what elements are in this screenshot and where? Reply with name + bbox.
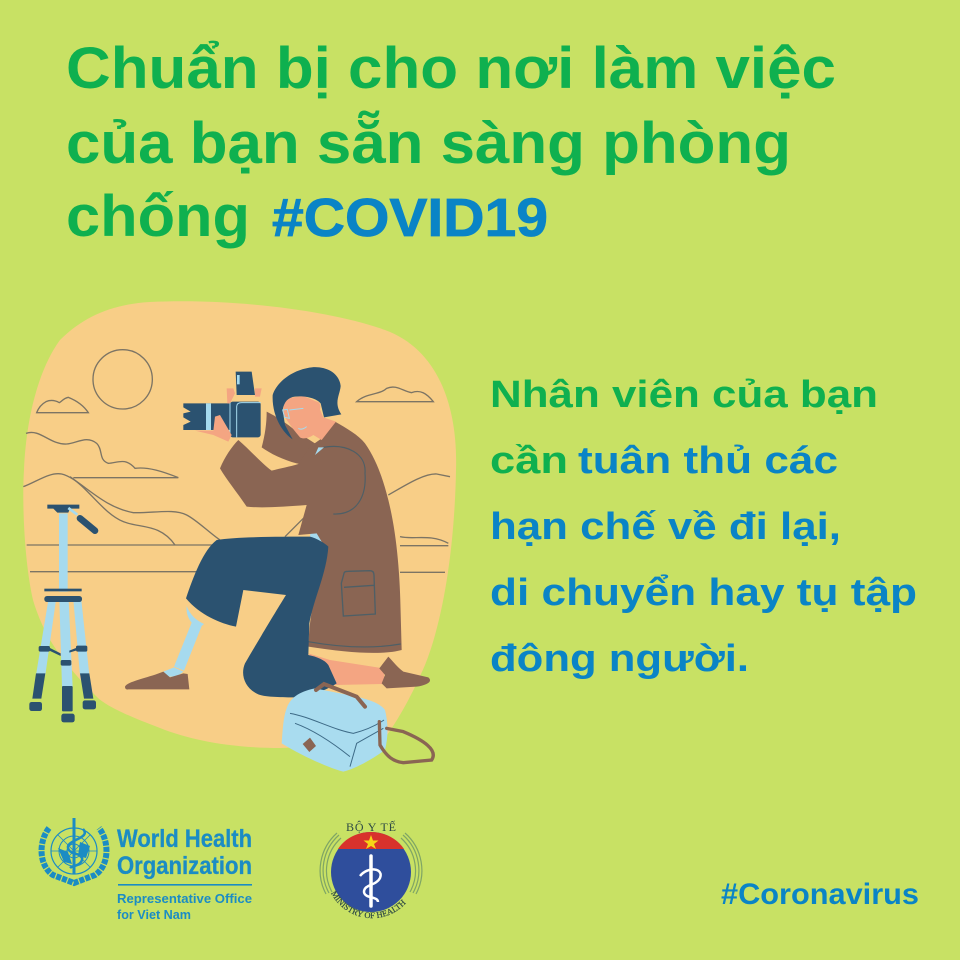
- body text: di chuyển hay tụ tập: [490, 572, 917, 614]
- logo: Ministry of Health: MINISTRY OF HEALTH: [330, 890, 406, 918]
- tripod and prosthetic leg: [29, 505, 204, 722]
- logo: World Health Organization: Representative Office: [117, 891, 252, 906]
- ear, glasses and smile: [314, 402, 320, 412]
- logo: World Health Organization: for Viet Nam: [117, 907, 191, 922]
- WHO wordmark: [117, 825, 252, 880]
- back foot: [308, 653, 385, 685]
- landscape: sun, cloud and hills: [23, 350, 220, 572]
- trousers: [186, 537, 337, 697]
- WHO wordmark: Organization: [117, 852, 252, 880]
- title: Chuẩn bị cho nơi làm việc: [66, 36, 836, 101]
- WHO emblem: [42, 818, 106, 883]
- raised arm behind: [262, 412, 320, 467]
- coat: [220, 422, 402, 653]
- bag: [282, 688, 387, 772]
- logo: World Health Organization: [42, 818, 252, 922]
- hands: [195, 415, 232, 442]
- WHO wordmark: World Health: [117, 825, 252, 853]
- logo lettering: BỘ Y TẾ: [346, 819, 396, 834]
- title: #COVID19: [272, 188, 548, 248]
- illustration: photographer: [23, 301, 456, 772]
- body text: cần: [490, 440, 568, 482]
- landscape: right cloud and hills: [285, 387, 450, 572]
- shield: [331, 832, 411, 912]
- hair: [273, 367, 341, 439]
- neck and face: [283, 396, 336, 440]
- outer wheat rings: [320, 833, 422, 894]
- body text: tuân thủ các: [578, 440, 838, 482]
- camera: [183, 403, 230, 430]
- shirt: [310, 507, 329, 545]
- logo: Ministry of Health: [320, 819, 422, 918]
- body text: [490, 374, 917, 680]
- title: chống: [66, 184, 250, 249]
- body text: Nhân viên của bạn: [490, 374, 878, 416]
- background blob: [23, 301, 456, 748]
- prosthetic leg and shoe: [174, 606, 204, 671]
- body text: hạn chế về đi lại,: [490, 506, 841, 548]
- staff and snake: [369, 856, 373, 906]
- body text: đông người.: [490, 638, 749, 680]
- photographer figure: [183, 367, 433, 772]
- title: [66, 36, 836, 249]
- title: của bạn sẵn sàng phòng: [66, 111, 791, 176]
- hashtag: #Coronavirus: [721, 878, 919, 911]
- shoe: [379, 657, 430, 688]
